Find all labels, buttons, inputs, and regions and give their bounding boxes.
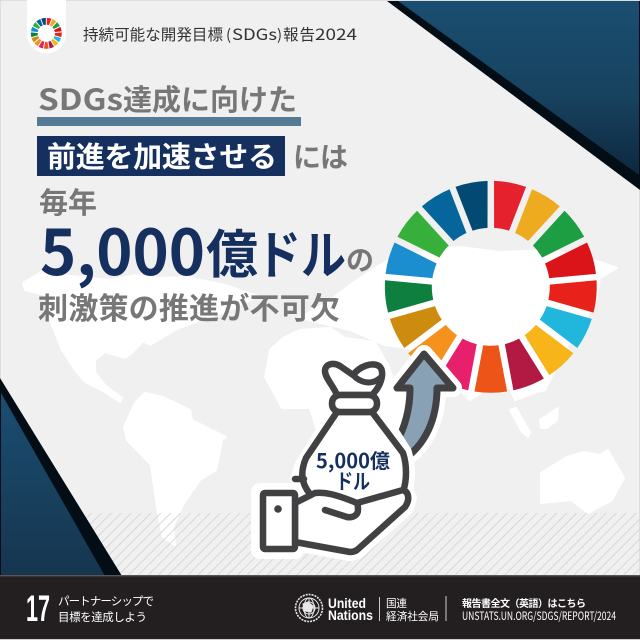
header title [83, 23, 357, 45]
hatched floor band [0, 513, 640, 576]
arrow [395, 354, 453, 460]
heading の: の [346, 239, 374, 279]
bottom-left triangle [0, 378, 122, 576]
header title: 持続可能な開発目標 [83, 23, 223, 45]
logo tab [27, 0, 66, 54]
money bag and hand [260, 364, 408, 552]
icon: bag fold [355, 377, 380, 382]
department name: 国連 [386, 596, 407, 611]
bag label: 5,000億 [316, 445, 390, 474]
big amount [40, 203, 346, 294]
United Nations wordmark [328, 596, 373, 623]
goal number: 17 [26, 588, 50, 629]
icon: cuff [263, 493, 295, 549]
heading 毎年: 毎年 [39, 180, 97, 222]
SDG wheel [384, 180, 598, 393]
icon: bag body [302, 412, 406, 494]
footer [0, 575, 640, 639]
world map [23, 247, 624, 545]
header title: ( [226, 24, 231, 45]
header title: 報告 [283, 23, 315, 45]
icon: UN emblem [296, 594, 322, 622]
heading underline [37, 117, 301, 126]
top-right triangle [387, 1, 640, 190]
bag label [316, 445, 390, 496]
header title: 2024 [315, 23, 357, 45]
report link: 報告書全文（英語）はこちら [462, 595, 586, 610]
header title: ) [277, 24, 282, 45]
icon: thumb [325, 503, 358, 517]
department name [386, 596, 439, 624]
bag label: ドル [336, 466, 370, 496]
United Nations wordmark: Nations [328, 608, 373, 623]
icon: bag neck [332, 395, 377, 412]
heading last line: 刺激策の推進が不可欠 [38, 284, 340, 328]
icon: cuff button [274, 505, 282, 513]
goal name [58, 593, 154, 625]
bag outline halo [260, 364, 408, 552]
heading line 1: 達成に向けた [123, 77, 297, 119]
heading line 1: SDGs [38, 77, 123, 119]
highlighted heading box: 前進を加速させる [47, 134, 277, 176]
heading line 1 [38, 77, 297, 119]
icon: small SDG wheel [31, 18, 62, 49]
icon: hand [295, 490, 408, 552]
heading には: には [293, 136, 348, 176]
department name: 経済社会局 [386, 609, 439, 624]
big amount: ドル [256, 214, 346, 289]
report link [462, 595, 616, 624]
goal name: 目標を達成しよう [58, 609, 147, 625]
big amount: 5,000 [40, 203, 205, 294]
header title: SDGs [232, 23, 277, 45]
big amount: 億 [206, 213, 258, 288]
icon: bag top [325, 364, 382, 395]
goal name: パートナーシップで [58, 593, 154, 609]
United Nations wordmark: United [328, 596, 366, 611]
icon: bag nub [295, 476, 304, 482]
